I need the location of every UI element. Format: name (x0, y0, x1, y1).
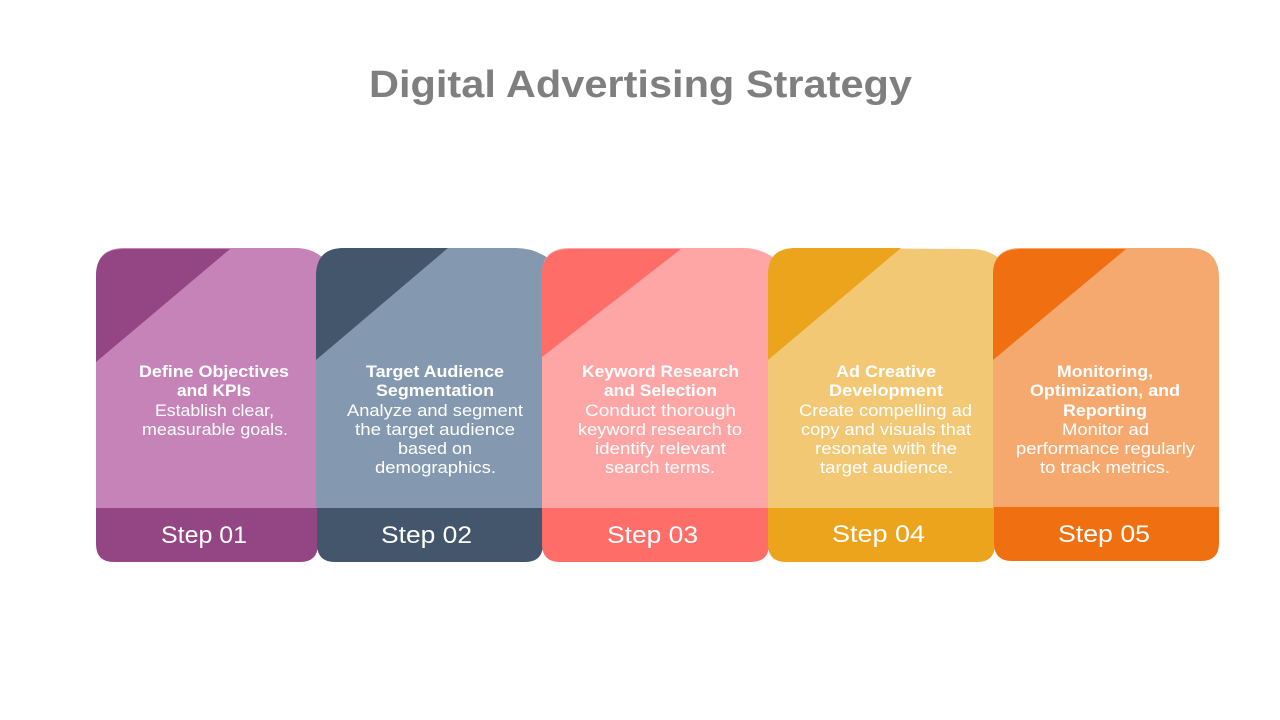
label: step 05: Step 05 (1058, 521, 1150, 548)
footer bar: step 04 (768, 508, 995, 562)
corner triangle: step 01 (96, 249, 230, 362)
footer bar: step 01 (96, 508, 318, 562)
corner triangle: step 03 (542, 249, 681, 357)
text block: step 05: Optimization, and (1030, 382, 1180, 400)
footer bar: step 03 (542, 508, 769, 562)
text block: step 05: to track metrics. (1040, 459, 1170, 477)
label: step 02: Step 02 (381, 522, 472, 549)
label: step 03: Step 03 (607, 522, 698, 549)
text block: step 04: target audience. (820, 459, 953, 477)
panel: step 02 target audience (316, 248, 548, 562)
panel: step 04 ad creative (768, 248, 1000, 562)
panel: step 05 monitoring (993, 248, 1219, 561)
text block: step 04: Development (829, 382, 944, 400)
text block: step 05: Reporting (1063, 402, 1147, 420)
text block: step 04: Ad Creative (836, 363, 936, 381)
text block: step 01: Define Objectives (139, 363, 289, 381)
text block: step 05: Monitor ad (1062, 421, 1149, 439)
text block: step 01: Establish clear, (155, 402, 274, 420)
corner triangle: step 02 (316, 248, 448, 360)
text block: step 05: Monitoring, (1057, 363, 1153, 381)
text block: step 01: and KPIs (177, 382, 251, 400)
text block: step 01: measurable goals. (142, 421, 288, 439)
text block: step 02: Segmentation (376, 382, 494, 400)
text block: step 03: keyword research to (578, 421, 742, 439)
text block: step 02: Target Audience (366, 363, 504, 381)
panel: step 03 keyword research (542, 248, 774, 562)
footer bar: step 02 (317, 508, 543, 562)
text block: step 03: Conduct thorough (585, 402, 736, 420)
text block: step 02: the target audience (355, 421, 515, 439)
text block: step 03: Keyword Research (582, 363, 739, 381)
text block: step 02 (347, 363, 523, 477)
label: step 04: Step 04 (832, 521, 925, 548)
text block: step 03 (578, 363, 742, 477)
label: step 01: Step 01 (161, 522, 247, 549)
text block: step 01 (139, 363, 289, 439)
title: Digital Advertising Strategy (369, 64, 912, 106)
text block: step 04: Create compelling ad (799, 402, 972, 420)
corner triangle: step 04 (768, 248, 901, 360)
text block: step 04: resonate with the (815, 440, 957, 458)
footer bar: step 05 (994, 507, 1219, 561)
text block: step 05 (1016, 363, 1196, 477)
text block: step 03: identify relevant (595, 440, 726, 458)
text block: step 03: and Selection (604, 382, 717, 400)
text block: step 02: based on (398, 440, 472, 458)
text block: step 02: demographics. (375, 459, 496, 477)
corner triangle: step 05 (993, 249, 1126, 360)
text block: step 05: performance regularly (1016, 440, 1196, 458)
text block: step 03: search terms. (605, 459, 715, 477)
panel: step 01 define objectives (96, 248, 322, 562)
text block: step 02: Analyze and segment (347, 402, 523, 420)
text block: step 04 (799, 363, 972, 477)
text block: step 04: copy and visuals that (801, 421, 971, 439)
